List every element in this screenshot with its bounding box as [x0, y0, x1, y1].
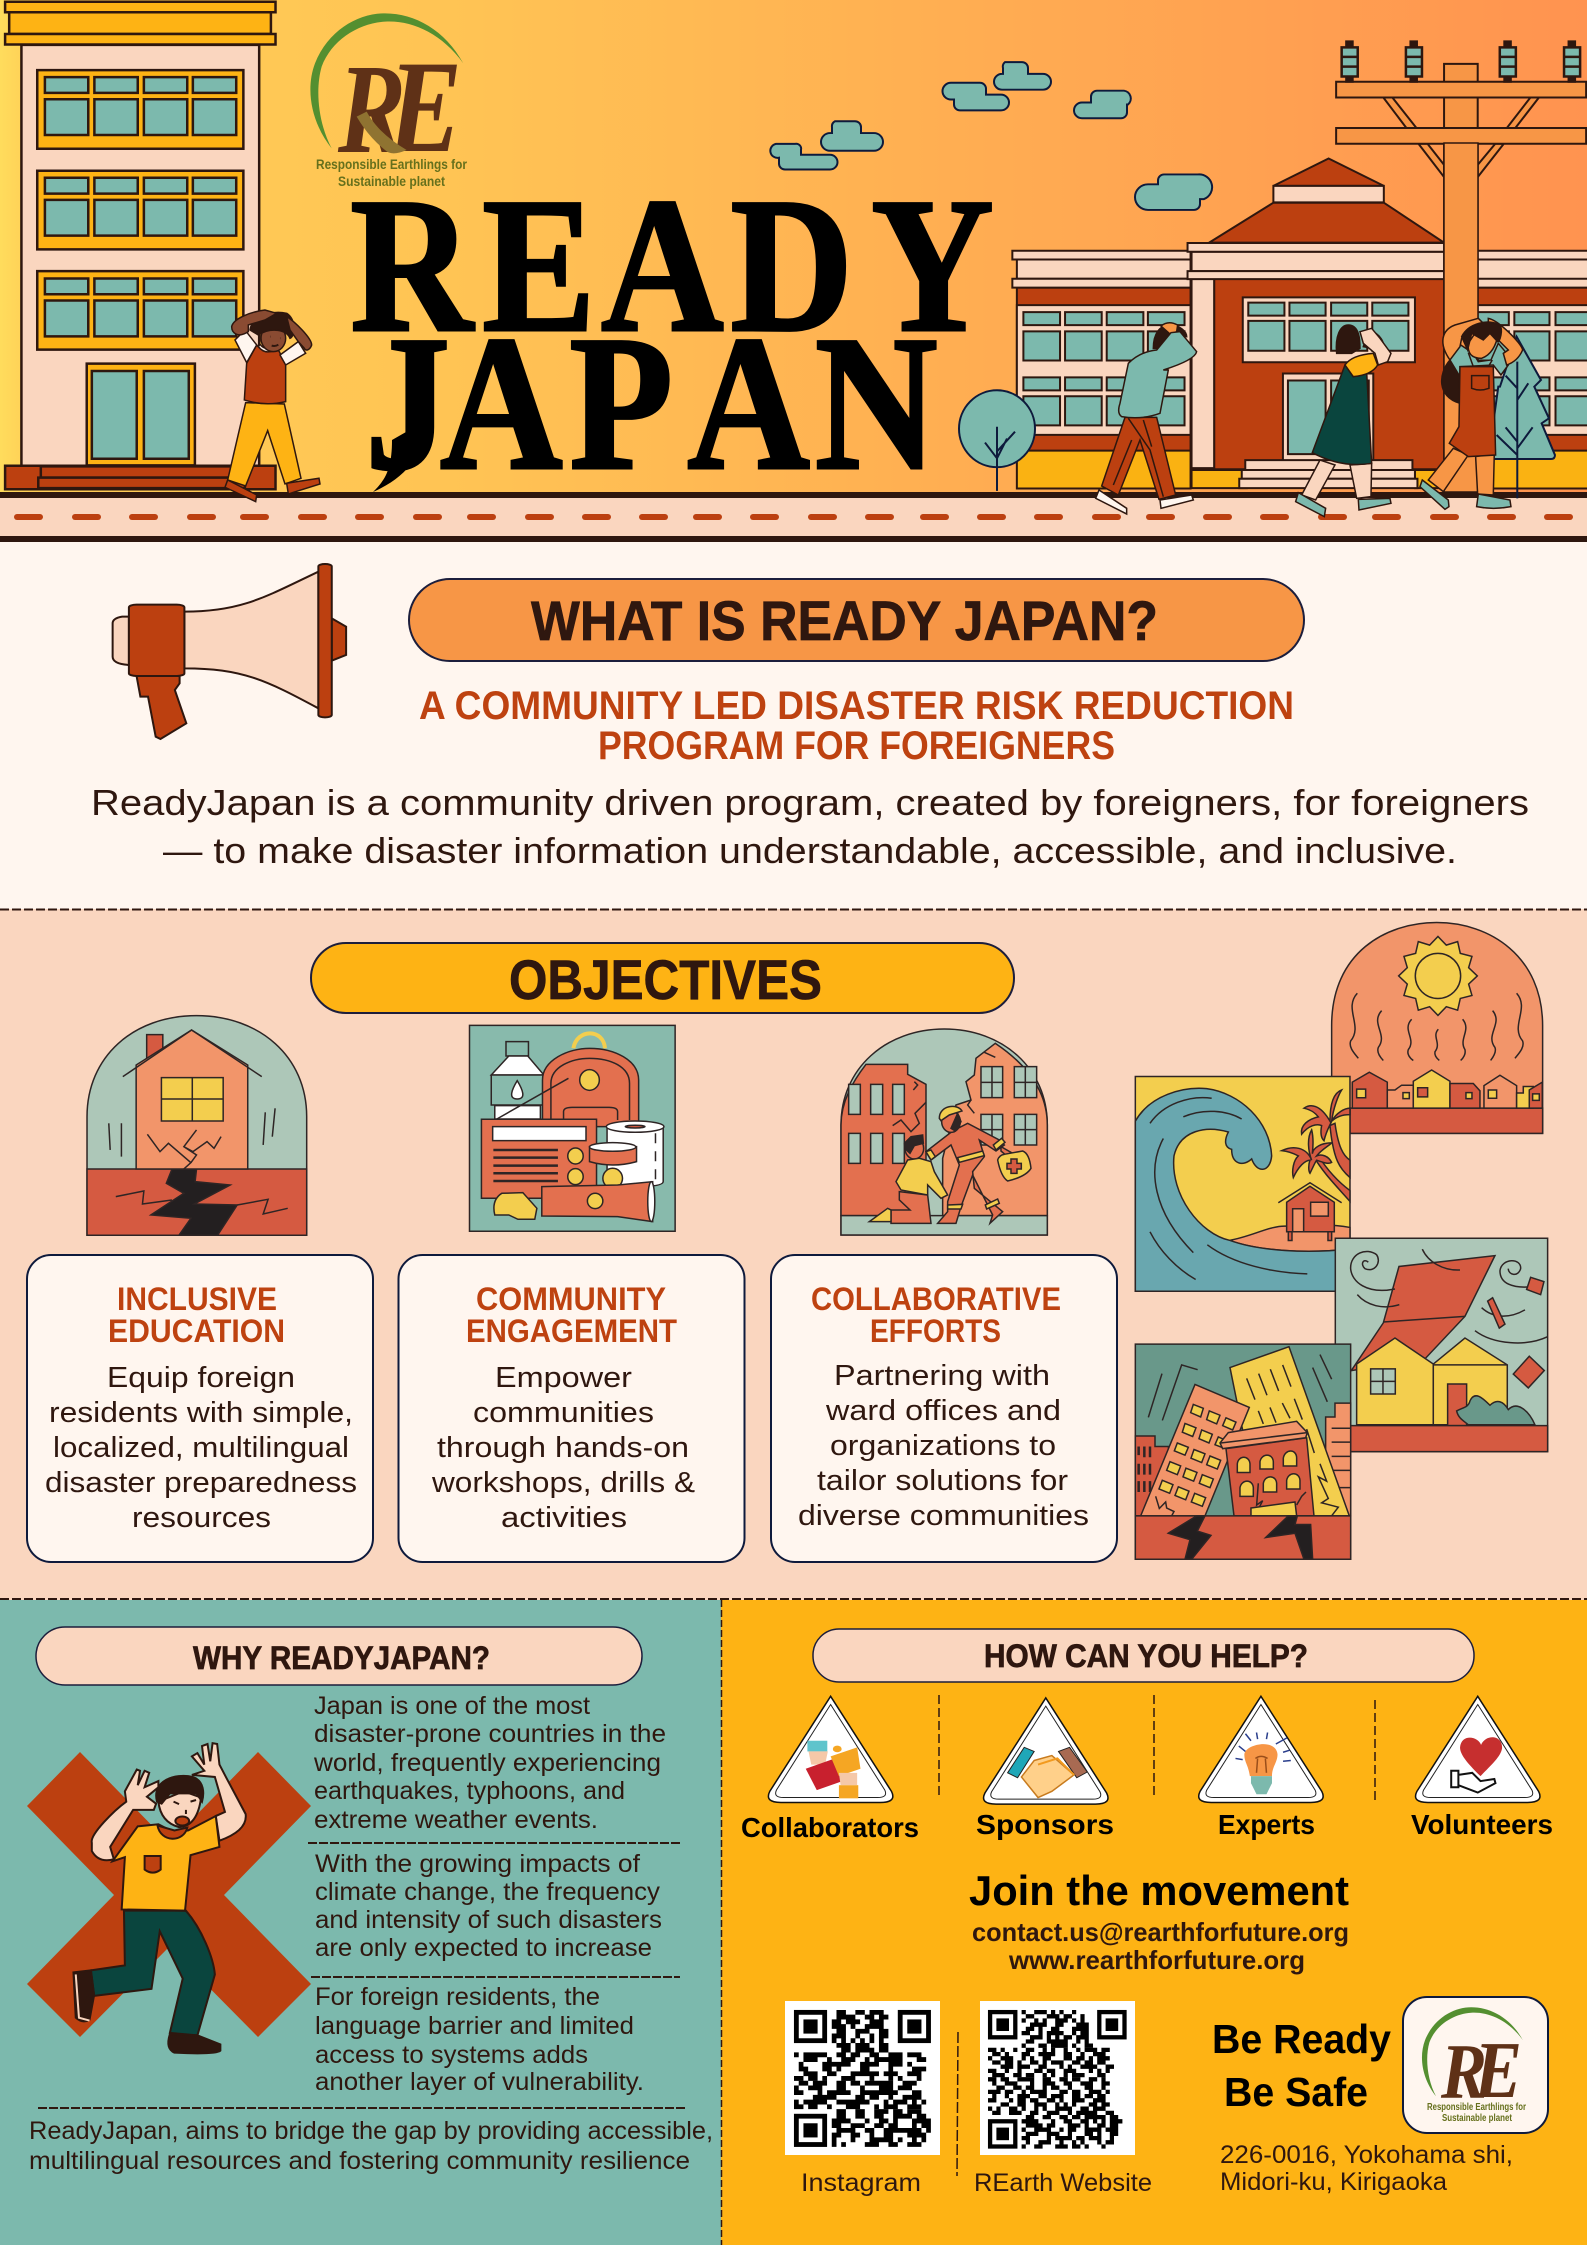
logo: Responsible Earthlings: R	[337, 38, 406, 180]
logo: Responsible Earthlings	[310, 13, 468, 189]
card: inclusive education: INCLUSIVE	[117, 1281, 277, 1317]
person with hands on head, left	[225, 310, 320, 502]
text block: why paragraph 1: Japan is one of the most	[314, 1692, 590, 1720]
panel: objectives	[0, 909, 1587, 1600]
apartment building	[5, 2, 276, 489]
text block: why paragraph 4	[29, 2117, 713, 2175]
card: collaborative efforts: COLLABORATIVE	[811, 1281, 1061, 1317]
left wing	[1012, 251, 1191, 489]
intro text	[91, 782, 1529, 871]
card: inclusive education: residents with simple,	[49, 1397, 353, 1429]
illustration: typhoon	[1335, 1238, 1548, 1452]
label: experts: Experts	[1218, 1809, 1315, 1840]
dividers between help items	[939, 1695, 1375, 1801]
title: READY JAPAN	[350, 159, 994, 510]
label: rearth website: REarth Website	[974, 2169, 1152, 2197]
card: collaborative efforts: Partnering with	[834, 1360, 1050, 1392]
icon: megaphone	[113, 564, 346, 739]
contact details: www.rearthforfuture.org	[1008, 1945, 1305, 1975]
logo badge	[1403, 1997, 1548, 2133]
heading pill: objectives: OBJECTIVES	[509, 948, 822, 1011]
card: collaborative efforts: organizations to	[830, 1430, 1056, 1462]
label: collaborators: Collaborators	[741, 1812, 919, 1843]
icon: panicking man	[73, 1743, 246, 2053]
subheading: A COMMUNITY LED DISASTER RISK REDUCTION	[419, 684, 1294, 728]
card: collaborative efforts	[771, 1255, 1117, 1562]
intro text: — to make disaster information understandable, accessible, and inclusive.	[163, 830, 1457, 871]
logo: Responsible Earthlings: Sustainable planet	[338, 174, 445, 189]
icon: red X	[27, 1752, 311, 2037]
icon: emergency kit	[470, 1025, 675, 1231]
logo: Responsible Earthlings: Responsible Earthlings for	[316, 157, 468, 172]
icon: sponsors	[984, 1698, 1108, 1804]
text block: why paragraph 2: are only expected to increase	[315, 1934, 652, 1962]
address	[1220, 2141, 1513, 2196]
text block: why paragraph 2: With the growing impacts of	[315, 1850, 640, 1878]
pole trunk front	[1444, 143, 1478, 492]
card: community engagement: through hands-on	[437, 1432, 689, 1464]
text block: why paragraph 3: language barrier and limited	[315, 2012, 634, 2040]
text block: why paragraph 1: extreme weather events.	[314, 1806, 598, 1834]
contact details	[972, 1917, 1349, 1975]
card: community engagement	[398, 1255, 744, 1562]
text block: why paragraph 2	[315, 1850, 662, 1962]
logo badge: Sustainable planet	[1442, 2113, 1513, 2124]
icon: cracked house	[87, 1016, 307, 1235]
card: collaborative efforts: ward offices and	[825, 1395, 1061, 1427]
heading pill: how can you help: HOW CAN YOU HELP?	[984, 1638, 1308, 1674]
text block: why paragraph 4: multilingual resources and fostering community resilience	[29, 2147, 690, 2175]
text block: why paragraph 3: access to systems adds	[315, 2041, 588, 2069]
label: sponsors: Sponsors	[976, 1809, 1114, 1840]
title: READY JAPAN: JAPAN	[365, 297, 938, 510]
heading pill: objectives	[311, 943, 1014, 1013]
address: 226-0016, Yokohama shi,	[1220, 2141, 1513, 2169]
icon: experts	[1199, 1696, 1323, 1802]
logo badge: E	[1473, 2027, 1522, 2115]
subheading: PROGRAM FOR FOREIGNERS	[598, 724, 1115, 768]
text block: why paragraph 1: world, frequently experiencing	[313, 1749, 661, 1777]
person in teal sweater	[1096, 323, 1197, 514]
card: community engagement: Empower	[495, 1362, 632, 1394]
logo badge: Responsible Earthlings for	[1427, 2102, 1526, 2113]
card: community engagement: ENGAGEMENT	[466, 1313, 677, 1349]
icon: collaborators	[768, 1696, 893, 1802]
school building	[1012, 159, 1587, 489]
text block: why paragraph 4: ReadyJapan, aims to bridge the gap by providing accessible,	[29, 2117, 713, 2145]
icon: rescuers	[841, 1029, 1047, 1235]
panel: how can you help	[721, 1600, 1587, 2245]
card: collaborative efforts: diverse communities	[798, 1500, 1089, 1532]
logo: Responsible Earthlings: E	[387, 33, 462, 180]
card: community engagement: COMMUNITY	[476, 1281, 666, 1317]
right wing	[1478, 251, 1587, 489]
heading pill: what is ready japan: WHAT IS READY JAPAN?	[531, 589, 1158, 652]
subheading	[419, 684, 1294, 768]
illustration: earthquake	[1135, 1344, 1351, 1559]
card: collaborative efforts: tailor solutions for	[817, 1465, 1068, 1497]
card: community engagement: workshops, drills &	[431, 1467, 695, 1499]
text block: why paragraph 1: earthquakes, typhoons, and	[314, 1777, 625, 1805]
heading pill: what is ready japan	[409, 579, 1304, 661]
card: inclusive education	[27, 1255, 373, 1562]
label: instagram: Instagram	[801, 2169, 921, 2197]
card: inclusive education: Equip foreign	[107, 1362, 295, 1394]
panel: why ReadyJapan	[0, 1600, 721, 2245]
card: inclusive education: disaster preparedness	[45, 1467, 357, 1499]
logo badge: R	[1440, 2028, 1487, 2115]
slogan: be ready be safe: Be Ready	[1212, 2016, 1391, 2062]
slogan: be ready be safe	[1212, 2016, 1391, 2115]
title: READY JAPAN: READY	[350, 159, 994, 372]
round tree	[959, 390, 1035, 491]
address: Midori-ku, Kirigaoka	[1220, 2168, 1447, 2196]
text block: why paragraph 2: climate change, the frequency	[315, 1878, 661, 1906]
slogan: be ready be safe: Be Safe	[1224, 2069, 1368, 2115]
illustration: tsunami	[1135, 1077, 1350, 1291]
illustration: heatwave	[1332, 923, 1543, 1133]
central block	[1188, 243, 1444, 488]
text block: why paragraph 3: another layer of vulnerability.	[315, 2068, 644, 2096]
text block: why paragraph 3: For foreign residents, the	[315, 1983, 600, 2011]
card: inclusive education: EDUCATION	[108, 1313, 285, 1349]
card: inclusive education: resources	[132, 1502, 271, 1534]
person in green dress	[1296, 325, 1391, 517]
icon: volunteers	[1416, 1696, 1540, 1802]
card: community engagement: activities	[501, 1502, 627, 1534]
call to action: join the movement: Join the movement	[969, 1867, 1349, 1914]
heading pill: why readyjapan	[36, 1627, 642, 1685]
road	[0, 492, 1587, 536]
contact details: contact.us@rearthforfuture.org	[972, 1917, 1349, 1947]
card: inclusive education: localized, multilingual	[53, 1432, 349, 1464]
card: collaborative efforts: EFFORTS	[870, 1313, 1001, 1349]
person in overalls	[1420, 318, 1523, 509]
label: volunteers: Volunteers	[1411, 1809, 1553, 1840]
text block: why paragraph 1	[313, 1692, 666, 1834]
roof	[1209, 159, 1444, 243]
pine tree	[1488, 337, 1555, 498]
header banner	[0, 0, 1587, 536]
text block: why paragraph 1: disaster-prone countries in the	[314, 1720, 666, 1748]
divider between QR codes	[957, 2032, 958, 2176]
QR code: Instagram	[785, 2001, 940, 2155]
card: community engagement: communities	[473, 1397, 654, 1429]
text block: why paragraph 3	[315, 1983, 644, 2096]
utility pole	[1336, 41, 1586, 492]
text block: why paragraph 2: and intensity of such disasters	[315, 1906, 662, 1934]
intro text: ReadyJapan is a community driven program, created by foreigners, for foreigners	[91, 782, 1529, 823]
heading pill: why readyjapan: WHY READYJAPAN?	[193, 1640, 490, 1676]
panel: what is Ready Japan	[0, 536, 1587, 909]
heading pill: how can you help	[813, 1629, 1474, 1682]
QR code: REarth website	[980, 2001, 1135, 2155]
clouds	[770, 62, 1212, 210]
